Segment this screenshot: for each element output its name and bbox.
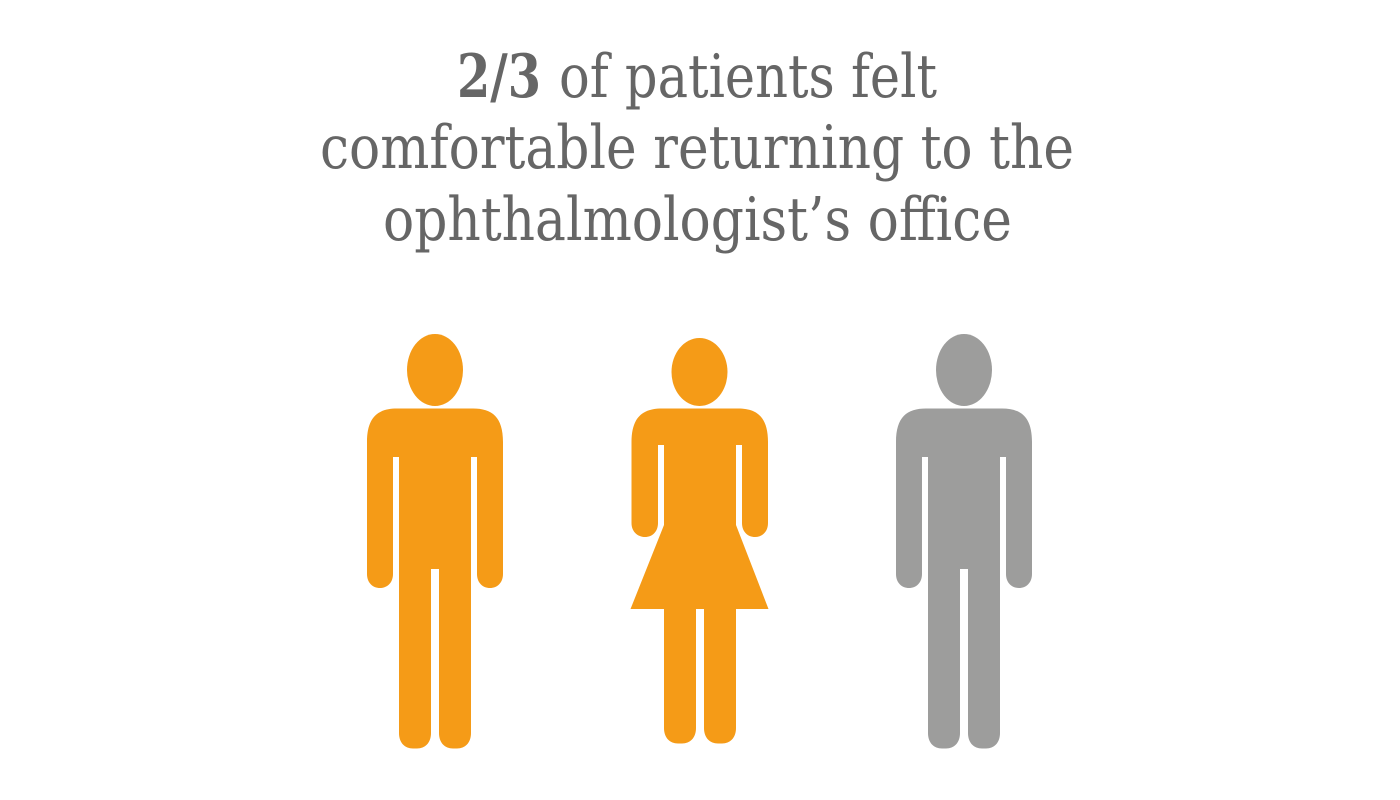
title: 2/3: [457, 42, 541, 112]
title: ophthalmologist’s office: [383, 185, 1012, 255]
title: [320, 42, 1074, 255]
title: of patients felt: [559, 42, 937, 112]
icon: orange man: [367, 334, 503, 748]
icon: grey man: [896, 334, 1032, 748]
icon: orange woman: [630, 338, 768, 744]
title: comfortable returning to the: [320, 113, 1074, 183]
